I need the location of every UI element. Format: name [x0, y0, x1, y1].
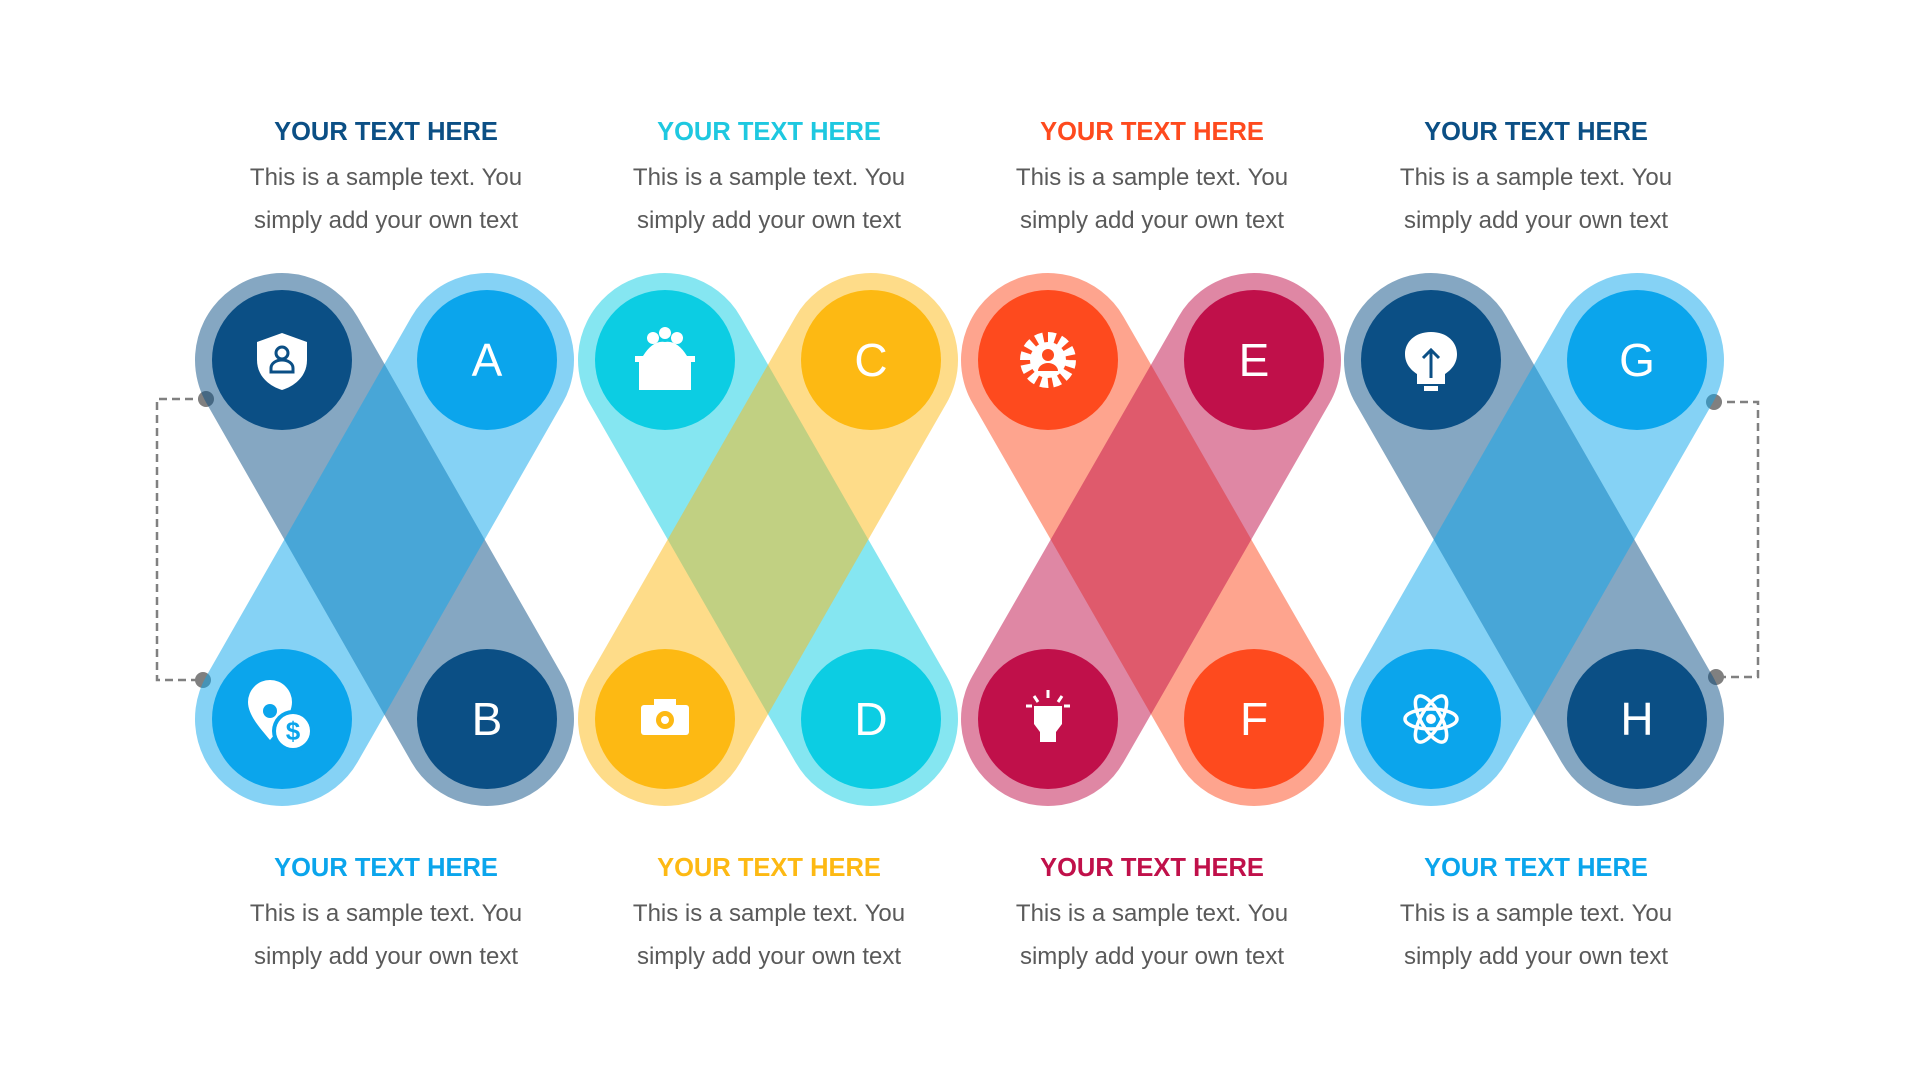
text: top 2: This is a sample text. You — [633, 164, 905, 191]
X group 3 — [1048, 360, 1254, 719]
circle: D: D — [854, 693, 888, 745]
X group 2 — [665, 360, 871, 719]
circle: G — [1567, 290, 1707, 430]
connector left — [157, 391, 214, 688]
circle: gear icon — [978, 290, 1118, 430]
text: bottom 3: YOUR TEXT HERE — [1040, 854, 1264, 882]
text: top 2: YOUR TEXT HERE — [657, 118, 881, 146]
text: top 4: YOUR TEXT HERE — [1424, 118, 1648, 146]
text: bottom 4: This is a sample text. You — [1400, 900, 1672, 927]
text: bottom 2: YOUR TEXT HERE — [657, 854, 881, 882]
circle: G: G — [1619, 334, 1655, 386]
text: top 4: This is a sample text. You — [1400, 164, 1672, 191]
circle: A — [417, 290, 557, 430]
text: bottom 4 — [1400, 854, 1672, 970]
text: bottom 4: YOUR TEXT HERE — [1424, 854, 1648, 882]
text: bottom 2: This is a sample text. You — [633, 900, 905, 927]
text: top 4 — [1400, 118, 1672, 234]
text: top 3: simply add your own text — [1020, 207, 1284, 234]
text: top 1: YOUR TEXT HERE — [274, 118, 498, 146]
circle: dollar pin icon: $ — [286, 716, 301, 746]
text: bottom 1: simply add your own text — [254, 943, 518, 970]
text: top 3 — [1016, 118, 1288, 234]
circle: E — [1184, 290, 1324, 430]
text: bottom 1: YOUR TEXT HERE — [274, 854, 498, 882]
circle: F: F — [1240, 693, 1268, 745]
text: bottom 4: simply add your own text — [1404, 943, 1668, 970]
circle: F — [1184, 649, 1324, 789]
circle: camera icon — [595, 649, 735, 789]
circle: B: B — [472, 693, 502, 745]
circle: brain icon — [1361, 290, 1501, 430]
text: top 3: YOUR TEXT HERE — [1040, 118, 1264, 146]
circle: H — [1567, 649, 1707, 789]
text: bottom 2 — [633, 854, 905, 970]
text: bottom 2: simply add your own text — [637, 943, 901, 970]
circle: atom icon — [1361, 649, 1501, 789]
text: top 1 — [250, 118, 522, 234]
text: top 1: This is a sample text. You — [250, 164, 522, 191]
circle: H: H — [1620, 693, 1654, 745]
circle: shield icon — [212, 290, 352, 430]
text: bottom 3 — [1016, 854, 1288, 970]
circle: D — [801, 649, 941, 789]
circle: dollar pin icon — [212, 649, 352, 789]
circle: C: C — [854, 334, 888, 386]
circle: E: E — [1239, 334, 1269, 386]
circle: B — [417, 649, 557, 789]
text: bottom 1: This is a sample text. You — [250, 900, 522, 927]
text: bottom 1 — [250, 854, 522, 970]
text: top 2: simply add your own text — [637, 207, 901, 234]
text: top 1: simply add your own text — [254, 207, 518, 234]
X group 4 — [1431, 360, 1637, 719]
circle: podium icon — [595, 290, 735, 430]
circle: A: A — [472, 334, 503, 386]
text: top 2 — [633, 118, 905, 234]
text: top 4: simply add your own text — [1404, 207, 1668, 234]
text: bottom 3: This is a sample text. You — [1016, 900, 1288, 927]
X group 1 — [282, 360, 487, 719]
text: top 3: This is a sample text. You — [1016, 164, 1288, 191]
circle: C — [801, 290, 941, 430]
circle: fist icon — [978, 649, 1118, 789]
connector right — [1706, 394, 1758, 685]
text: bottom 3: simply add your own text — [1020, 943, 1284, 970]
